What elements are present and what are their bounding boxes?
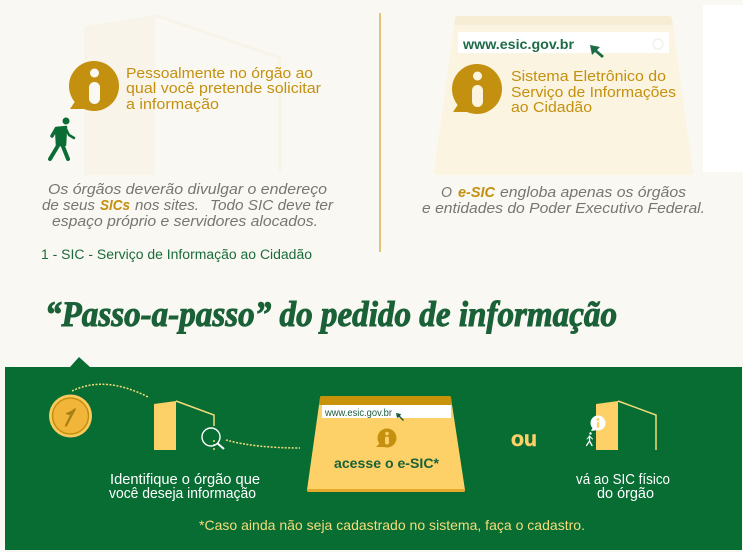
icon: information speech bubble xyxy=(69,61,119,111)
text block: e-SIC description: engloba apenas os órgãos xyxy=(500,184,687,201)
heading: e-SIC: Sistema Eletrônico do xyxy=(511,68,666,85)
footnote: SIC definition: 1 - SIC - Serviço de Informação ao Cidadão xyxy=(41,247,312,262)
panel: electronic e-SIC xyxy=(422,16,705,217)
icon: cursor arrow xyxy=(396,413,404,421)
icon: walking person xyxy=(50,118,74,159)
browser window illustration xyxy=(434,16,693,175)
step label: identify: Identifique o órgão que xyxy=(110,472,260,488)
step label: identify: você deseja informação xyxy=(109,486,256,502)
label: ou: ou xyxy=(511,428,537,451)
icon: walking person xyxy=(586,432,592,446)
step label: physical SIC: do órgão xyxy=(597,486,654,502)
ghost building illustration xyxy=(84,15,280,175)
heading: in person: a informação xyxy=(126,96,219,113)
heading: e-SIC: Serviço de Informações xyxy=(511,84,676,101)
icon: building with magnifier xyxy=(154,401,224,450)
step label: physical SIC: vá ao SIC físico xyxy=(576,472,670,488)
footnote: registration: *Caso ainda não seja cadastrado no sistema, faça o cadastro. xyxy=(199,517,585,533)
heading: in person: Pessoalmente no órgão ao xyxy=(126,65,313,82)
text block: SIC description: de seus xyxy=(42,197,95,214)
heading: e-SIC: ao Cidadão xyxy=(511,99,592,116)
icon: number 1 coin xyxy=(49,394,92,438)
icon: building with visitor xyxy=(586,401,656,450)
text block: e-SIC description: O xyxy=(441,184,452,201)
arrow: dashed curve to building xyxy=(72,384,148,397)
icon: information speech bubble xyxy=(452,64,502,114)
heading: in person: qual você pretende solicitar xyxy=(126,80,321,97)
text block: SIC description: espaço próprio e servidores alocados. xyxy=(52,213,318,230)
panel: in-person SIC xyxy=(41,15,337,262)
icon: cursor arrow xyxy=(590,45,604,58)
arrow: dashed curve to window xyxy=(226,440,300,448)
text block: e-SIC description: e entidades do Poder Executivo Federal. xyxy=(422,200,705,217)
url text: www.esic.gov.br xyxy=(324,408,393,419)
panel background xyxy=(5,357,742,550)
text block: SIC description: Os órgãos deverão divulgar o endereço xyxy=(48,181,327,198)
browser window: access e-SIC xyxy=(307,396,465,492)
text block: SIC description: Todo SIC deve ter xyxy=(210,197,334,214)
text block: e-SIC description: e-SIC xyxy=(458,184,496,201)
url text: www.esic.gov.br xyxy=(462,36,575,52)
panel: step-by-step xyxy=(5,357,742,550)
title: “Passo-a-passo” do pedido de informação xyxy=(45,294,617,334)
icon: information bubble xyxy=(376,428,396,448)
text block: SIC description: nos sites. xyxy=(135,197,199,214)
label: acesse o e-SIC: acesse o e-SIC* xyxy=(334,455,440,471)
text block: SIC description: SICs xyxy=(100,197,130,214)
